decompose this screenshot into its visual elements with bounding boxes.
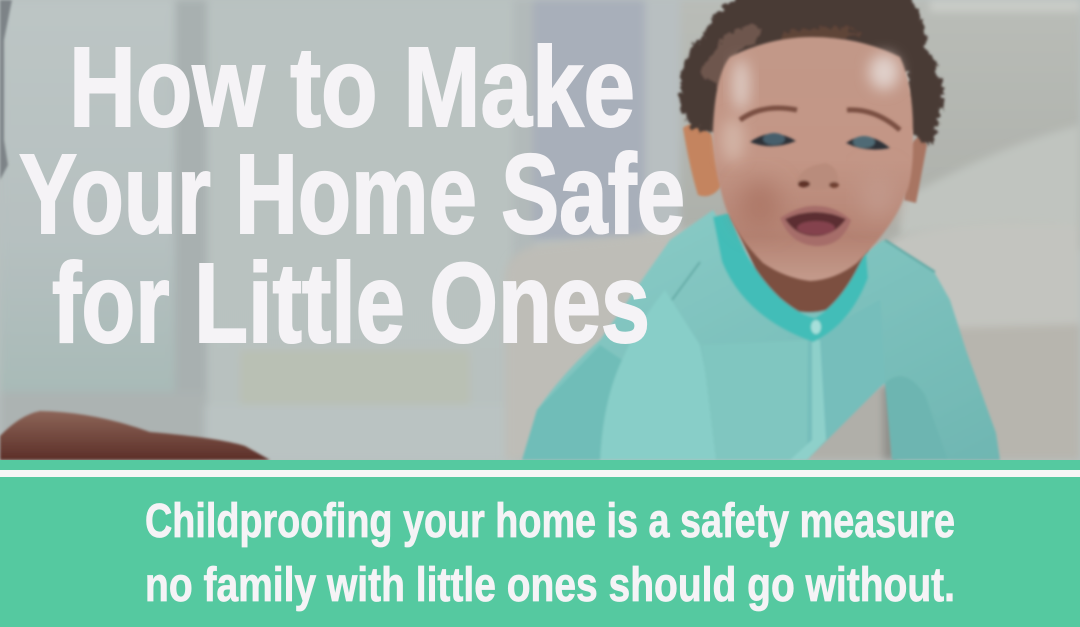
subtitle xyxy=(145,495,955,612)
baby ears xyxy=(683,124,927,203)
photo: baby xyxy=(522,0,1000,460)
baby face xyxy=(713,37,913,281)
title: How to Make xyxy=(69,24,635,150)
baby neck xyxy=(730,215,870,312)
photo: sofa xyxy=(505,125,1080,460)
baby sleepsuit xyxy=(522,210,1000,460)
green banner xyxy=(0,460,1080,627)
baby face highlights xyxy=(721,54,899,229)
title: for Little Ones xyxy=(52,240,650,366)
baby hair xyxy=(678,0,941,146)
title: Your Home Safe xyxy=(19,131,685,257)
photo: adult hand xyxy=(0,0,270,460)
baby collar xyxy=(713,213,868,342)
baby eyes and brows xyxy=(740,108,900,190)
photo: room background xyxy=(0,0,1080,460)
baby mouth xyxy=(780,206,851,246)
title xyxy=(19,24,685,366)
